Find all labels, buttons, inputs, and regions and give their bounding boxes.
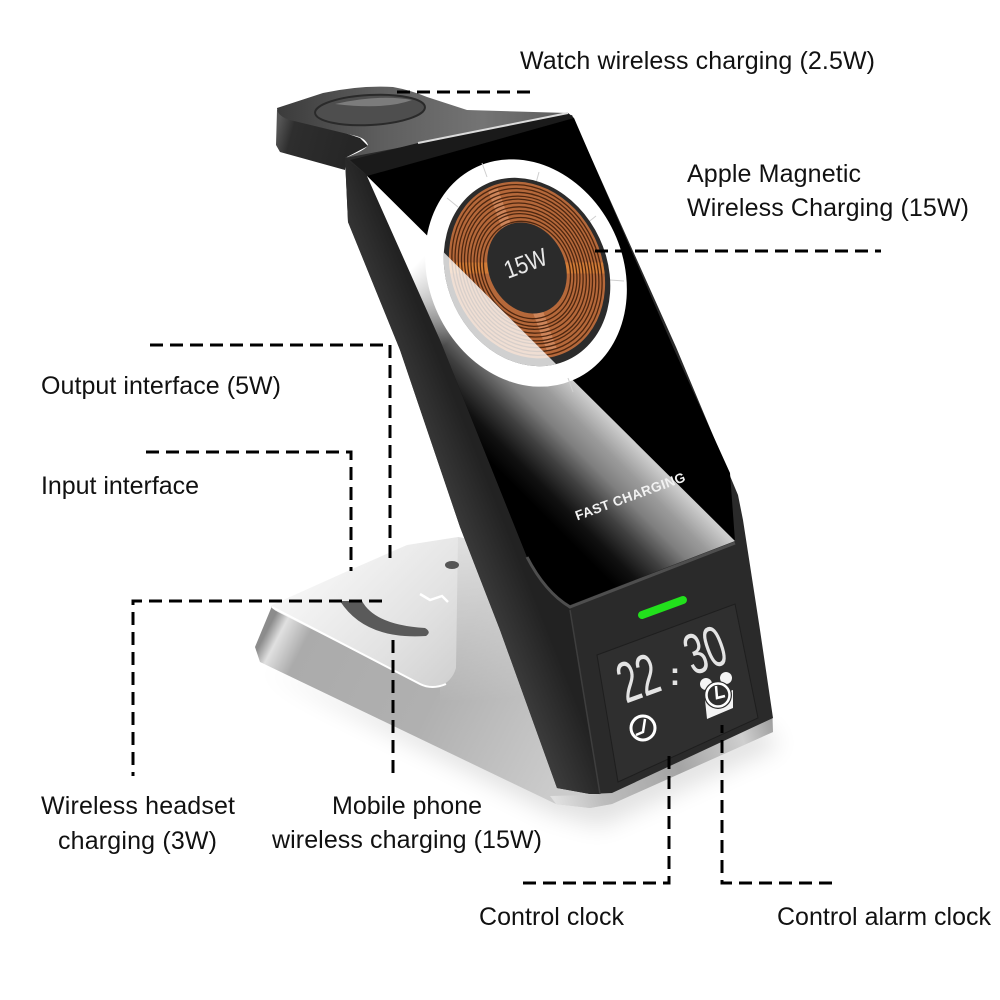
icon: alarm clock [700,672,733,719]
display frame [597,604,758,782]
front corner line [570,610,600,794]
product: charging stand [255,87,780,826]
label: wireless headset charging: charging (3W) [58,827,217,855]
glass top highlight [367,176,735,605]
label: input interface: Input interface [41,472,199,500]
base dimple [445,561,459,569]
clock digits 30: 30 [675,613,735,688]
label: watch charging: Watch wireless charging (2.5W) [520,47,875,75]
callout line: apple magnetic [595,250,881,252]
label: mobile phone charging: Mobile phone [332,792,482,820]
main black body [345,115,773,794]
green LED [642,600,683,615]
label: mobile phone charging: wireless charging (15W) [271,826,542,854]
copper coil [448,182,606,358]
coil dark disc [414,150,640,394]
clock colon: : [670,656,680,692]
body left side [345,158,600,794]
coil centre [473,209,581,327]
callout line: control clock [523,750,669,883]
glass panel [367,118,735,605]
disc reflection overlay [444,252,556,366]
ring ticks [447,163,624,392]
label: wireless headset charging [41,792,235,855]
label: apple magnetic charging: Wireless Charging (15W) [687,194,969,222]
panel top band [350,113,574,176]
15W label: 15W [500,243,551,285]
white ring [389,126,663,420]
fast charging label: FAST CHARGING [573,470,687,523]
callout line: watch charging [397,90,537,94]
top edge highlight [418,113,568,143]
headset charging crescent [340,601,429,636]
label: apple magnetic charging: Apple Magnetic [687,160,861,188]
icon: clock [631,716,655,740]
label: output interface: Output interface (5W) [41,372,281,400]
panel lower lip [527,543,735,607]
label: mobile phone charging [271,792,542,854]
label: control clock: Control clock [479,903,624,931]
watch charging arm [276,87,572,170]
glass reflection [367,176,735,605]
silver base [255,537,773,808]
callout line: control alarm clock [722,725,832,883]
callout line: output interface [150,345,390,561]
label: control alarm clock: Control alarm clock [777,903,992,931]
watch puck [314,92,426,128]
base top plate [272,537,458,687]
base glint [420,594,448,602]
clock digits 22: 22 [608,641,668,716]
callout line: mobile phone [392,640,394,776]
label: apple magnetic charging [687,160,969,222]
callout line: wireless headset [133,601,382,776]
base shadow [262,668,780,826]
plate front edge [272,607,446,687]
label: wireless headset charging: Wireless headset [41,792,235,820]
callout line: input interface [146,452,351,571]
